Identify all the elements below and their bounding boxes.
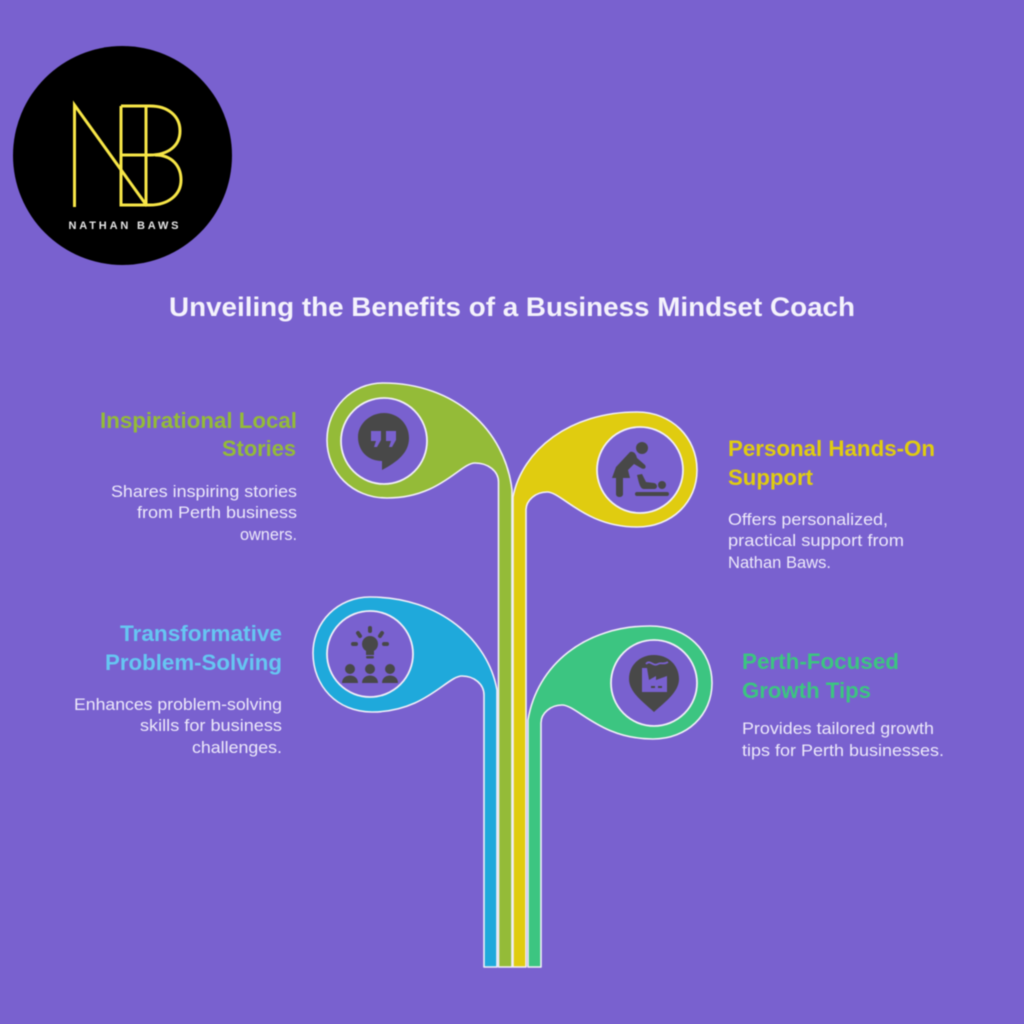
text: Transformative Problem-Solving: skills for business	[140, 717, 282, 735]
icon: speech bubble with quotes	[358, 413, 409, 470]
text: Personal Hands-On Support: Nathan Baws.	[728, 554, 831, 572]
text: Perth-Focused Growth Tips	[742, 649, 944, 760]
text: Inspirational Local Stories: Stories	[222, 436, 296, 461]
text: Perth-Focused Growth Tips: tips for Perth businesses.	[742, 742, 944, 760]
text: Inspirational Local Stories: Inspirational Local	[100, 408, 297, 433]
text: Transformative Problem-Solving: Transformative	[120, 621, 282, 646]
text: Inspirational Local Stories: owners.	[240, 526, 297, 544]
text: Perth-Focused Growth Tips: Perth-Focused	[742, 649, 899, 674]
stem and leaf: green	[327, 383, 512, 967]
text: Transformative Problem-Solving: challenges.	[192, 739, 282, 757]
tree diagram	[313, 383, 712, 967]
icon: person changing baby	[612, 442, 669, 497]
text: Personal Hands-On Support: practical support from	[728, 532, 904, 550]
text: Transformative Problem-Solving: Enhances problem-solving	[74, 696, 282, 714]
icon: factory map pin	[629, 655, 679, 712]
text: Personal Hands-On Support	[728, 436, 935, 572]
text: Personal Hands-On Support: Personal Hands-On	[728, 436, 935, 461]
logo: Nathan Baws: NATHAN BAWS	[68, 220, 178, 232]
stem and leaf: yellow	[513, 412, 697, 967]
text: Personal Hands-On Support: Offers personalized,	[728, 511, 888, 529]
stem and leaf: blue	[313, 597, 497, 967]
text: Perth-Focused Growth Tips: Growth Tips	[742, 678, 871, 703]
logo: Nathan Baws	[13, 46, 232, 265]
icon: lightbulb and people	[342, 628, 398, 683]
text: Transformative Problem-Solving	[74, 621, 282, 757]
stem and leaf: mint	[528, 626, 712, 967]
text: Inspirational Local Stories: Shares inspiring stories	[111, 483, 297, 501]
text: Transformative Problem-Solving: Problem-Solving	[105, 650, 282, 675]
text: Inspirational Local Stories	[100, 408, 297, 544]
title: Unveiling the Benefits of a Business Mindset Coach	[169, 292, 855, 322]
text: Personal Hands-On Support: Support	[728, 465, 814, 490]
text: Inspirational Local Stories: from Perth business	[137, 504, 297, 522]
text: Perth-Focused Growth Tips: Provides tailored growth	[742, 720, 934, 738]
